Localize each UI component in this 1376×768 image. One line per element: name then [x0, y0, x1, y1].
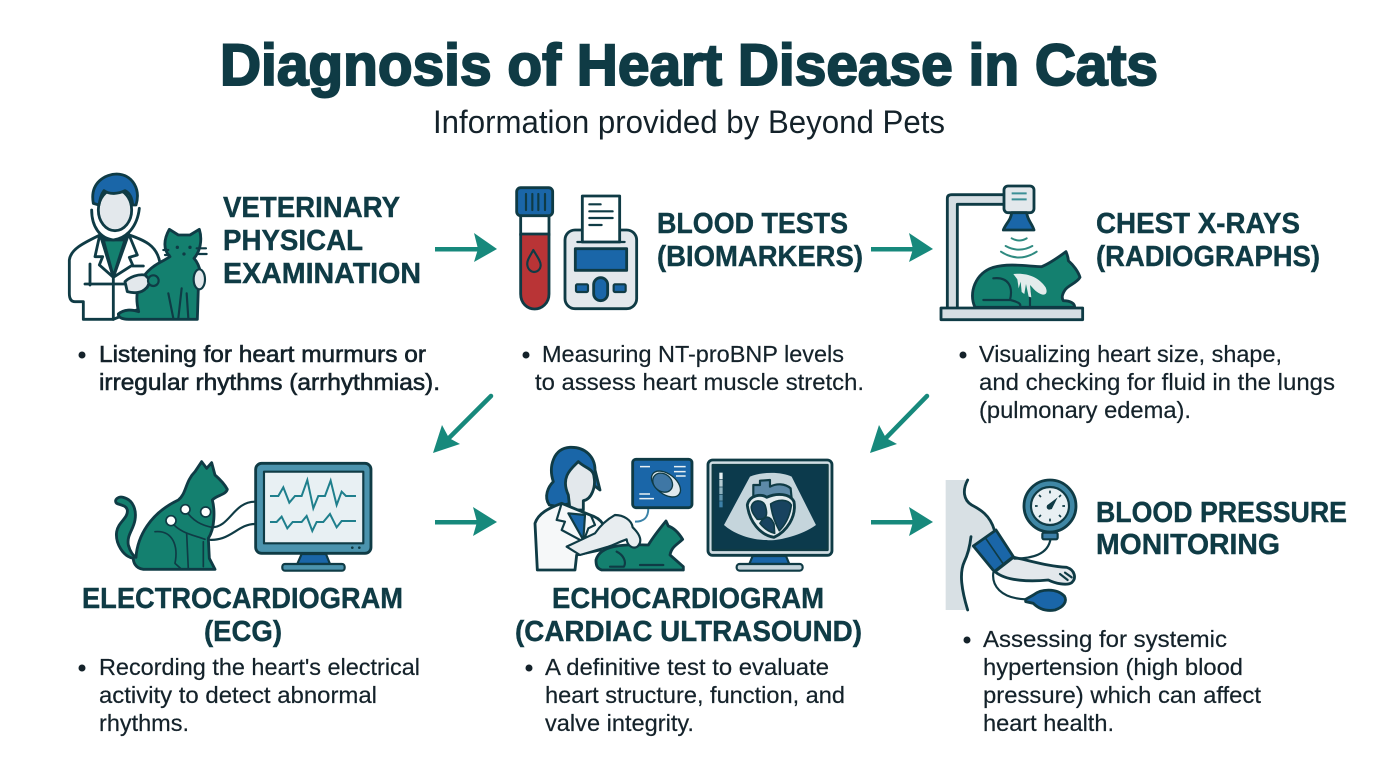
heading: BLOOD PRESSURE — [1096, 497, 1347, 529]
arrow: ecg to echocardiogram — [435, 507, 497, 536]
description: Recording the heart's electrical — [99, 654, 420, 680]
description — [964, 626, 1261, 736]
description: irregular rhythms (arrhythmias). — [99, 369, 440, 395]
heading: MONITORING — [1096, 529, 1280, 561]
description — [78, 654, 420, 736]
icon: vet examining cat — [69, 174, 207, 319]
heading: ECHOCARDIOGRAM — [552, 583, 824, 615]
panel: electrocardiogram — [78, 462, 420, 736]
panel: echocardiogram — [515, 447, 862, 736]
description: pressure) which can affect — [983, 682, 1261, 708]
icon: x-ray machine and cat — [941, 186, 1083, 320]
description — [960, 341, 1335, 423]
heading — [1096, 208, 1320, 273]
icon: blood tube and analyzer — [517, 188, 637, 309]
panel: chest x-rays — [941, 186, 1335, 423]
description: and checking for fluid in the lungs — [979, 369, 1335, 395]
arrow: blood tests to x-rays — [871, 233, 933, 262]
panel: veterinary physical examination — [69, 174, 440, 395]
heading — [82, 583, 403, 648]
icon: cat with ecg monitor — [116, 462, 371, 571]
arrow: blood tests to ecg — [433, 396, 491, 453]
description: to assess heart muscle stretch. — [535, 369, 864, 395]
icon: vet with ultrasound — [535, 447, 832, 571]
heading: BLOOD TESTS — [657, 208, 848, 240]
description: heart health. — [983, 710, 1114, 736]
description — [526, 654, 845, 736]
description: Visualizing heart size, shape, — [979, 341, 1282, 367]
description: valve integrity. — [545, 710, 694, 736]
heading — [223, 192, 421, 290]
heading: ELECTROCARDIOGRAM — [82, 583, 403, 615]
arrow: echocardiogram to blood pressure — [871, 507, 933, 536]
arrow: exam to blood tests — [435, 233, 497, 262]
heading — [515, 583, 862, 648]
panel: blood pressure monitoring — [946, 480, 1347, 736]
description: A definitive test to evaluate — [545, 654, 829, 680]
subtitle: Information provided by Beyond Pets — [433, 104, 945, 140]
description: (pulmonary edema). — [979, 397, 1191, 423]
description: hypertension (high blood — [983, 654, 1243, 680]
arrow: x-rays to echocardiogram — [870, 396, 927, 453]
description: heart structure, function, and — [545, 682, 845, 708]
description — [78, 341, 440, 395]
heading: (BIOMARKERS) — [657, 241, 863, 273]
icon: blood pressure cuff and gauge — [946, 480, 1076, 610]
heading: (ECG) — [204, 616, 282, 648]
heading: EXAMINATION — [223, 258, 421, 290]
description: Assessing for systemic — [983, 626, 1227, 652]
heading: PHYSICAL — [223, 225, 363, 257]
heading: (RADIOGRAPHS) — [1096, 241, 1320, 273]
panel: blood tests — [517, 188, 864, 395]
description — [522, 341, 864, 395]
heading: (CARDIAC ULTRASOUND) — [515, 616, 862, 648]
description: rhythms. — [99, 710, 189, 736]
title: Diagnosis of Heart Disease in Cats — [220, 33, 1158, 98]
heading — [1096, 497, 1347, 561]
heading: VETERINARY — [223, 192, 400, 224]
description: Measuring NT-proBNP levels — [542, 341, 844, 367]
description: activity to detect abnormal — [99, 682, 377, 708]
heading: CHEST X-RAYS — [1096, 208, 1300, 240]
description: Listening for heart murmurs or — [99, 341, 426, 367]
heading — [657, 208, 863, 273]
